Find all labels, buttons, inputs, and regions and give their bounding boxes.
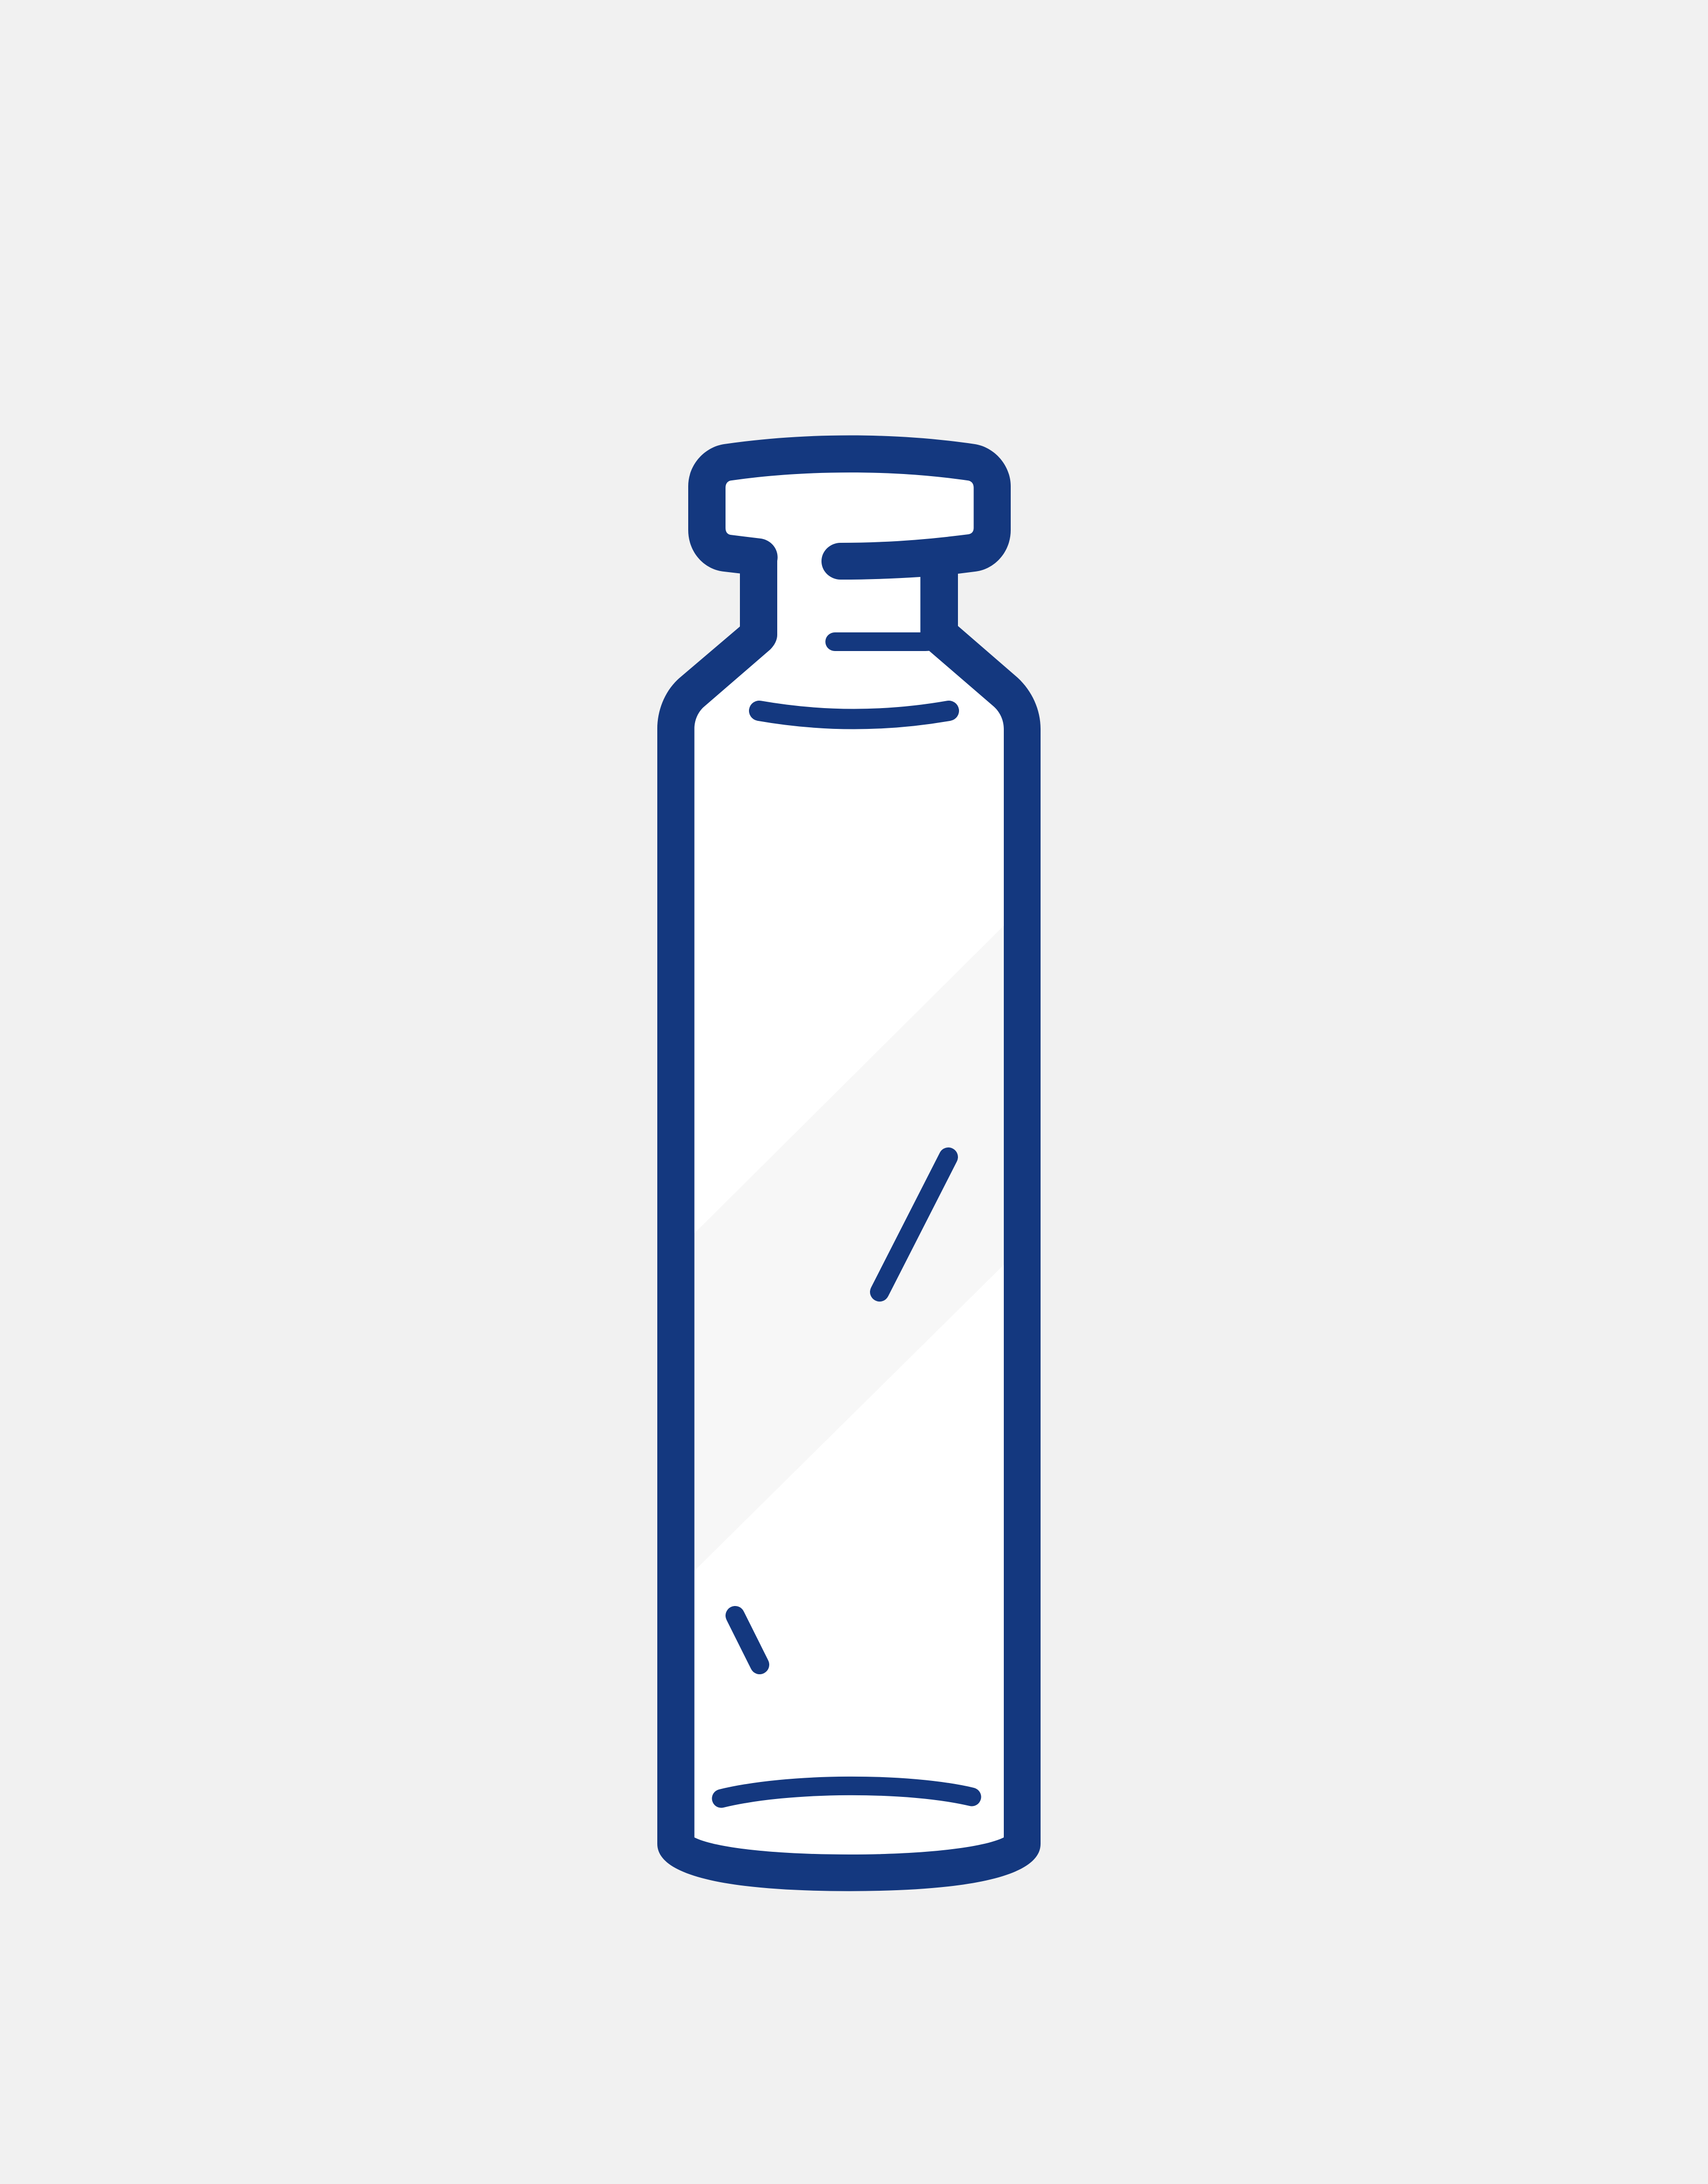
shoulder highlight arc bbox=[759, 711, 949, 719]
glass highlight: short diagonal bbox=[735, 1616, 760, 1665]
glass reflection band bbox=[695, 926, 1004, 1571]
glass highlight: long diagonal bbox=[880, 1157, 948, 1292]
bottle outline bbox=[657, 435, 1041, 1891]
bottle interior fill bbox=[695, 472, 1004, 1854]
icon: bottle bbox=[657, 435, 1041, 1891]
base highlight arc bbox=[721, 1786, 972, 1798]
